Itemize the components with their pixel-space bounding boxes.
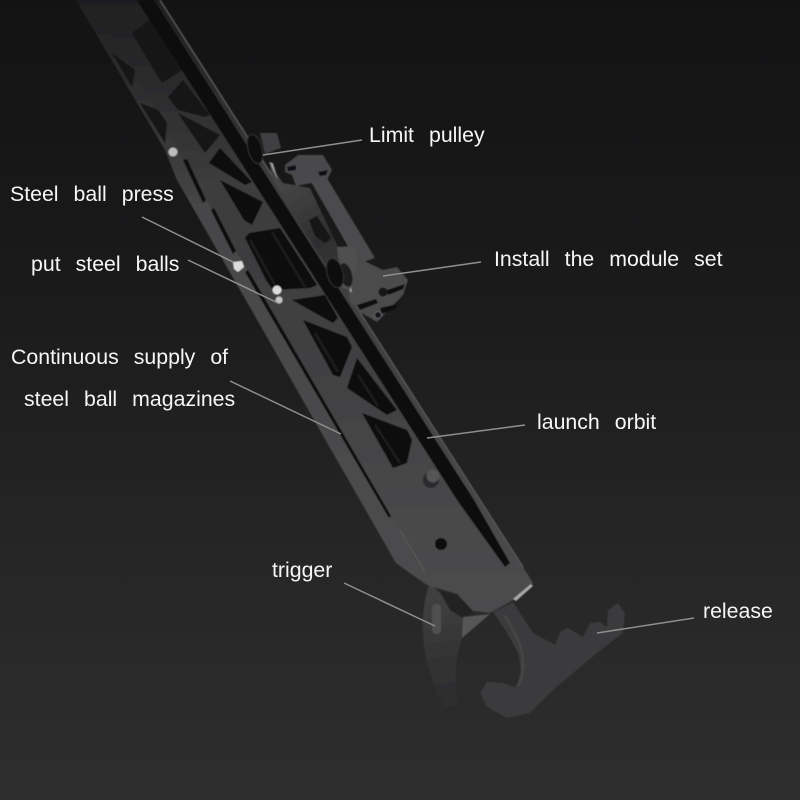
end plate: [345, 258, 408, 322]
end plate slots: [387, 284, 405, 295]
release lever crease: [504, 615, 523, 686]
screw lower: [374, 312, 382, 318]
leader lines: [142, 140, 694, 633]
window inner rails: [250, 232, 400, 463]
bracket notches: [287, 165, 296, 171]
peg: [423, 470, 440, 488]
trigger: [423, 583, 468, 722]
cover plate line: [400, 530, 425, 572]
label: Continuous supply of steel ball magazines: [11, 345, 235, 411]
screw: [378, 288, 388, 296]
release lever: [480, 602, 625, 718]
label: Install the module set: Install the module set: [494, 247, 723, 271]
steel balls and press screws: [168, 148, 282, 304]
launch channel: [137, 0, 510, 567]
label: put steel balls: put steel balls: [31, 252, 179, 276]
label: launch orbit: launch orbit: [537, 410, 656, 434]
label: release: release: [703, 599, 773, 623]
module recess: [309, 216, 331, 243]
arm: [310, 178, 375, 264]
module back plate: [270, 165, 362, 312]
slits: [183, 159, 391, 518]
module set: [270, 155, 408, 322]
lower pulley: [323, 246, 358, 290]
top bracket: [285, 155, 332, 186]
left rail strip: [76, 0, 427, 585]
label: Continuous supply of steel ball magazines: steel ball magazines: [24, 387, 235, 411]
hole: [435, 538, 447, 550]
label: trigger: trigger: [272, 558, 332, 582]
trigger pad: [432, 604, 441, 634]
top pulley: [244, 133, 281, 180]
label: Continuous supply of steel ball magazines: Continuous supply of: [11, 345, 228, 369]
label: Limit pulley: Limit pulley: [369, 123, 485, 147]
under-body shadow: [440, 592, 473, 618]
white sliver: [345, 283, 352, 293]
label: Steel ball press: Steel ball press: [10, 182, 174, 206]
rail body: [76, 0, 533, 613]
end highlight: [513, 584, 533, 601]
under-body bracket: [462, 614, 490, 638]
frame windows: [112, 20, 412, 468]
right rail edge highlight: [160, 0, 523, 567]
launcher rail assembly: [76, 0, 625, 722]
